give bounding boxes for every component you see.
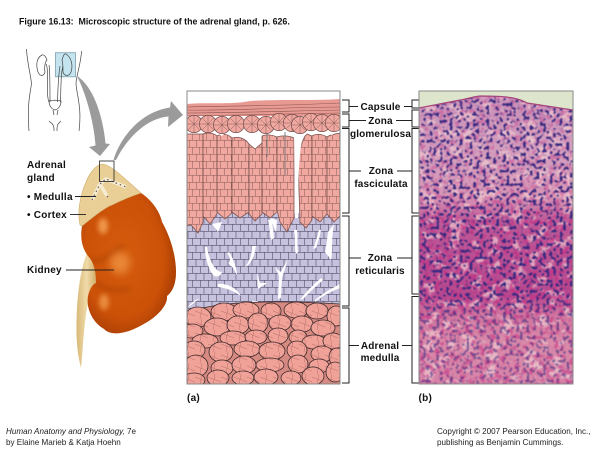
label: adrenal gland: gland (27, 173, 55, 184)
bracket: zona reticularis right (412, 216, 419, 294)
label: kidney: Kidney (27, 265, 62, 276)
label: zona glomerulosa (349, 116, 412, 140)
bracket: adrenal medulla right (412, 296, 419, 383)
bracket: capsule right (412, 100, 419, 108)
bracket: zona glomerulosa right (412, 110, 419, 127)
medulla stripe (92, 179, 126, 200)
bracket: adrenal medulla left (342, 308, 349, 383)
arrow: body to adrenal gland (77, 76, 110, 156)
adrenal medulla cell clusters (188, 302, 340, 384)
arrow: adrenal gland to cross-section (114, 101, 183, 160)
zona glomerulosa clusters (185, 113, 343, 134)
credit: copyright: Copyright © 2007 Pearson Education, Inc., (437, 427, 591, 436)
panel border (b) (419, 91, 573, 384)
label: zona glomerulosa: glomerulosa (350, 129, 411, 140)
label: medulla (27, 192, 96, 203)
label: zona glomerulosa: Zona (368, 116, 393, 127)
bracket: zona reticularis left (342, 216, 349, 306)
bracket: zona fasciculata left (342, 128, 349, 213)
label: adrenal medulla: Adrenal (361, 341, 399, 352)
panel: (a) tissue drawing (188, 99, 340, 384)
zona reticularis (187, 213, 340, 311)
label: kidney (27, 265, 114, 276)
label: adrenal medulla: medulla (361, 353, 400, 364)
label: medulla: • Medulla (27, 192, 73, 203)
credit: textbook: by Elaine Marieb & Katja Hoehn (6, 438, 121, 447)
label: zona reticularis: Zona (368, 253, 393, 264)
label: zona reticularis (349, 253, 412, 277)
label: adrenal medulla (349, 341, 412, 364)
bracket: capsule left (342, 100, 349, 112)
label: cortex: • Cortex (27, 210, 67, 221)
highlight box over kidney (56, 53, 76, 77)
bracket: zona fasciculata right (412, 128, 419, 213)
adrenal gland (79, 164, 141, 226)
panel: (b) micrograph (419, 91, 573, 384)
capsule layer (187, 99, 340, 116)
caption (b): (b) (418, 393, 432, 404)
credit: copyright: publishing as Benjamin Cummings. (437, 438, 563, 447)
label: capsule (349, 102, 412, 113)
label: zona fasciculata (349, 166, 412, 190)
label: zona fasciculata: Zona (369, 166, 394, 177)
white gaps in fasciculata (215, 131, 338, 218)
caption (a): (a) (187, 393, 200, 404)
zona fasciculata columns (187, 133, 340, 233)
bracket: zona glomerulosa left (342, 114, 349, 127)
icon: body outline with kidneys (26, 49, 82, 131)
label: zona reticularis: reticularis (355, 266, 405, 277)
label: capsule: Capsule (361, 102, 401, 113)
background above tissue (419, 91, 573, 110)
title: Figure 16.13: Microscopic structure of the adrenal gland, p. 626. (19, 16, 290, 26)
credit: textbook: 7e (125, 427, 137, 436)
kidney (81, 193, 176, 333)
credit: textbook: Human Anatomy and Physiology, (6, 427, 125, 436)
locator box on adrenal gland (100, 161, 114, 182)
panel border (a) (187, 91, 340, 384)
label: adrenal gland: Adrenal (27, 160, 66, 171)
ureter (76, 253, 97, 368)
label: cortex (27, 210, 86, 221)
label: zona fasciculata: fasciculata (354, 179, 408, 190)
